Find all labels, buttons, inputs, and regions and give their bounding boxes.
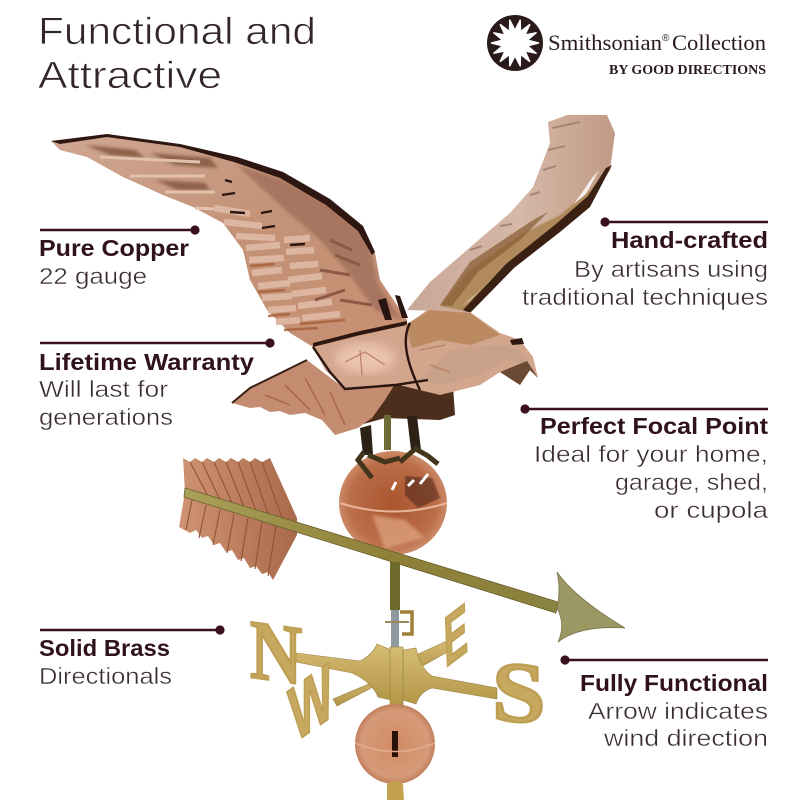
eagle body: [313, 310, 538, 395]
logo tagline: BY GOOD DIRECTIONS: [609, 62, 766, 77]
callout: Solid Brass: Solid Brass: [39, 635, 170, 661]
logo: Smithsonian Collection by Good Directions: [487, 15, 766, 77]
callout: Lifetime Warranty: Lifetime Warranty: [39, 349, 254, 375]
callout: Fully Functional: Fully Functional: [580, 670, 768, 696]
arrow shaft: [184, 488, 558, 613]
compass letters: E: [443, 588, 469, 684]
logo: Smithsonian Collection by Good Directions: ®: [662, 33, 670, 44]
compass letters: W: [285, 647, 338, 759]
callout: Hand-crafted: Hand-crafted: [611, 227, 768, 253]
title: Functional and: [38, 11, 316, 53]
callout: Perfect Focal Point: [520, 404, 768, 523]
illustration: eagle weathervane: [51, 115, 625, 800]
callout: Solid Brass: Directionals: [39, 663, 172, 689]
callout: Hand-crafted: traditional techniques: [522, 284, 768, 310]
title: [38, 11, 316, 97]
eagle left wing: [51, 134, 408, 347]
eagle legs: [360, 415, 421, 455]
callout: Pure Copper: 22 gauge: [39, 263, 147, 289]
globe under eagle: [339, 451, 447, 555]
eagle belly: [345, 372, 455, 425]
vertical rod: [385, 562, 412, 650]
pole: [387, 780, 404, 800]
compass letters: S: [492, 644, 546, 742]
title: Attractive: [38, 55, 222, 97]
callout: Pure Copper: [39, 225, 200, 289]
logo wordmark: Smithsonian: [548, 30, 662, 55]
callout: Lifetime Warranty: generations: [39, 404, 173, 430]
callout: Fully Functional: Arrow indicates: [588, 698, 768, 724]
callout: Fully Functional: [560, 655, 768, 751]
logo: Smithsonian Collection by Good Directions: Collection: [672, 30, 766, 55]
callout: Solid Brass: [39, 625, 225, 689]
eagle tail: [232, 360, 395, 435]
arrow fletching: [179, 458, 297, 580]
callout: Perfect Focal Point: garage, shed,: [615, 469, 768, 495]
callout: Hand-crafted: By artisans using: [574, 256, 768, 282]
eagle right wing: [407, 115, 615, 313]
callout: Lifetime Warranty: Will last for: [39, 376, 168, 402]
callout: Pure Copper: Pure Copper: [39, 235, 189, 261]
callout: Lifetime Warranty: [39, 338, 275, 430]
directional arms: [296, 640, 497, 706]
lower copper ball: [355, 704, 435, 784]
callout: Hand-crafted: [522, 217, 768, 310]
callout: Perfect Focal Point: or cupola: [654, 497, 768, 523]
compass letters: N: [250, 603, 302, 704]
arrow head: [557, 572, 625, 642]
callout: Perfect Focal Point: Perfect Focal Point: [540, 413, 768, 439]
bird talons: [358, 448, 438, 478]
icon: sunburst: [487, 15, 543, 71]
compass letters: [250, 588, 546, 759]
callout: Fully Functional: wind direction: [603, 725, 768, 751]
callout: Perfect Focal Point: Ideal for your home,: [534, 441, 768, 467]
